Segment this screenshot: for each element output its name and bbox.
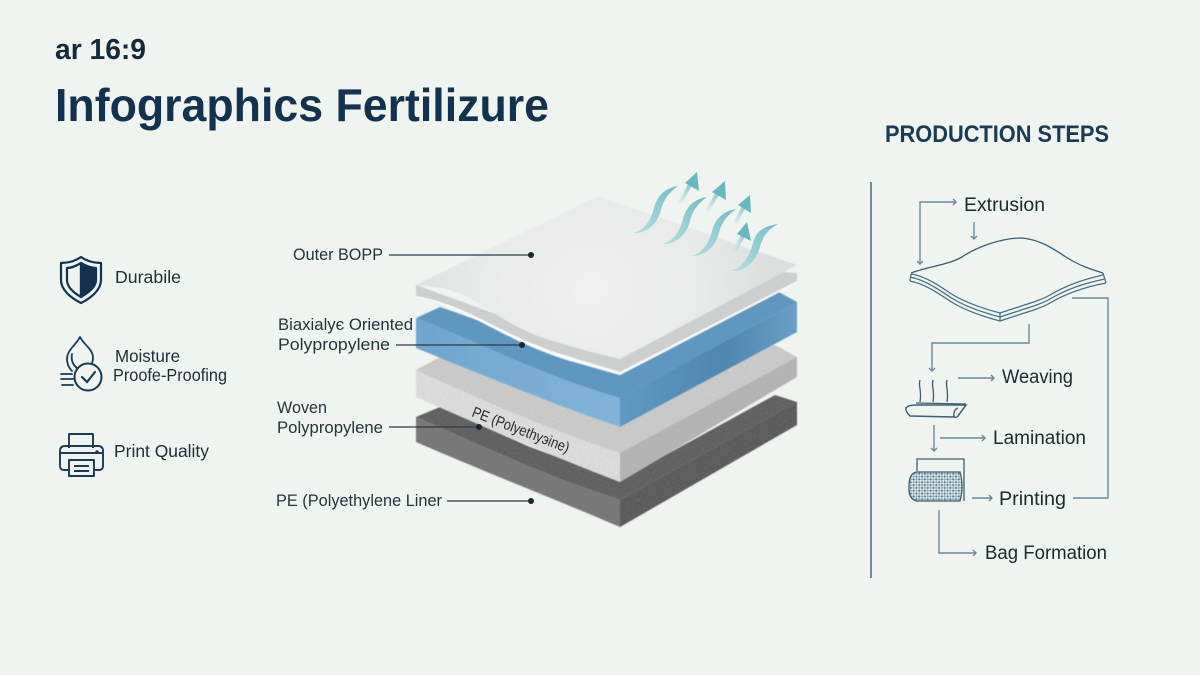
- label: moisture proofing: [113, 346, 227, 385]
- label: woven polypropylene: Woven: [277, 398, 327, 417]
- step: weaving: Weaving: [1002, 367, 1073, 388]
- panel: production flow: [906, 195, 1108, 564]
- icon: vapor arrows: [633, 172, 778, 271]
- step: bag formation: Bag Formation: [985, 543, 1107, 564]
- label: PE liner: [276, 491, 534, 510]
- icon: shield: [61, 257, 101, 303]
- icon: printing roller: [909, 459, 964, 501]
- arrows: printing: [939, 298, 1108, 556]
- label: biaxially oriented: [278, 315, 525, 354]
- step: printing: Printing: [999, 489, 1066, 510]
- step: lamination: Lamination: [993, 428, 1086, 449]
- panel: benefits: [60, 257, 227, 476]
- icon: moisture drop with check: [61, 337, 102, 390]
- label: moisture proofing: Proofe-Proofing: [113, 365, 227, 385]
- title: Infographics Fertilizure: [55, 79, 549, 131]
- label: durable: Durabile: [115, 267, 181, 287]
- upward arrows: [680, 181, 746, 250]
- step: extrusion: Extrusion: [964, 195, 1045, 216]
- layer: blue BOPP: [416, 290, 797, 427]
- arrows: weaving to lamination: [931, 425, 985, 451]
- label: outer BOPP: Outer BOPP: [293, 245, 383, 264]
- divider: [870, 182, 872, 578]
- icon: bag sheet: [910, 238, 1106, 321]
- chart: exploded layers: [416, 196, 797, 527]
- layer: dark PE liner: [416, 395, 797, 527]
- aspect ratio note: ar 16:9: [55, 34, 146, 66]
- layer: light woven polypropylene: [416, 340, 797, 482]
- label: moisture proofing: Moisture: [115, 346, 180, 366]
- label: biaxially oriented: Biaxialyє Oriented: [278, 315, 413, 334]
- layer: top white sheet: [416, 196, 797, 375]
- heading: production steps: PRODUCTION STEPS: [885, 121, 1109, 148]
- label: PE on layer: PE (Polyethyэine): [470, 404, 572, 457]
- layer labels: [276, 245, 572, 510]
- arrows: sheet to weaving: [929, 324, 1029, 381]
- label: woven polypropylene: [277, 398, 482, 437]
- label: PE liner: PE (Polyethylene Liner: [276, 491, 442, 510]
- label: outer BOPP: [293, 245, 534, 264]
- label: print quality: Print Quality: [114, 441, 209, 461]
- label: biaxially oriented: Polypropylene: [278, 335, 390, 354]
- wavy vapor streams: [633, 186, 778, 271]
- arrows: extrusion: [917, 199, 977, 264]
- label: woven polypropylene: Polypropylene: [277, 418, 383, 437]
- icon: printer: [60, 434, 103, 476]
- icon: weaving roller: [906, 380, 966, 417]
